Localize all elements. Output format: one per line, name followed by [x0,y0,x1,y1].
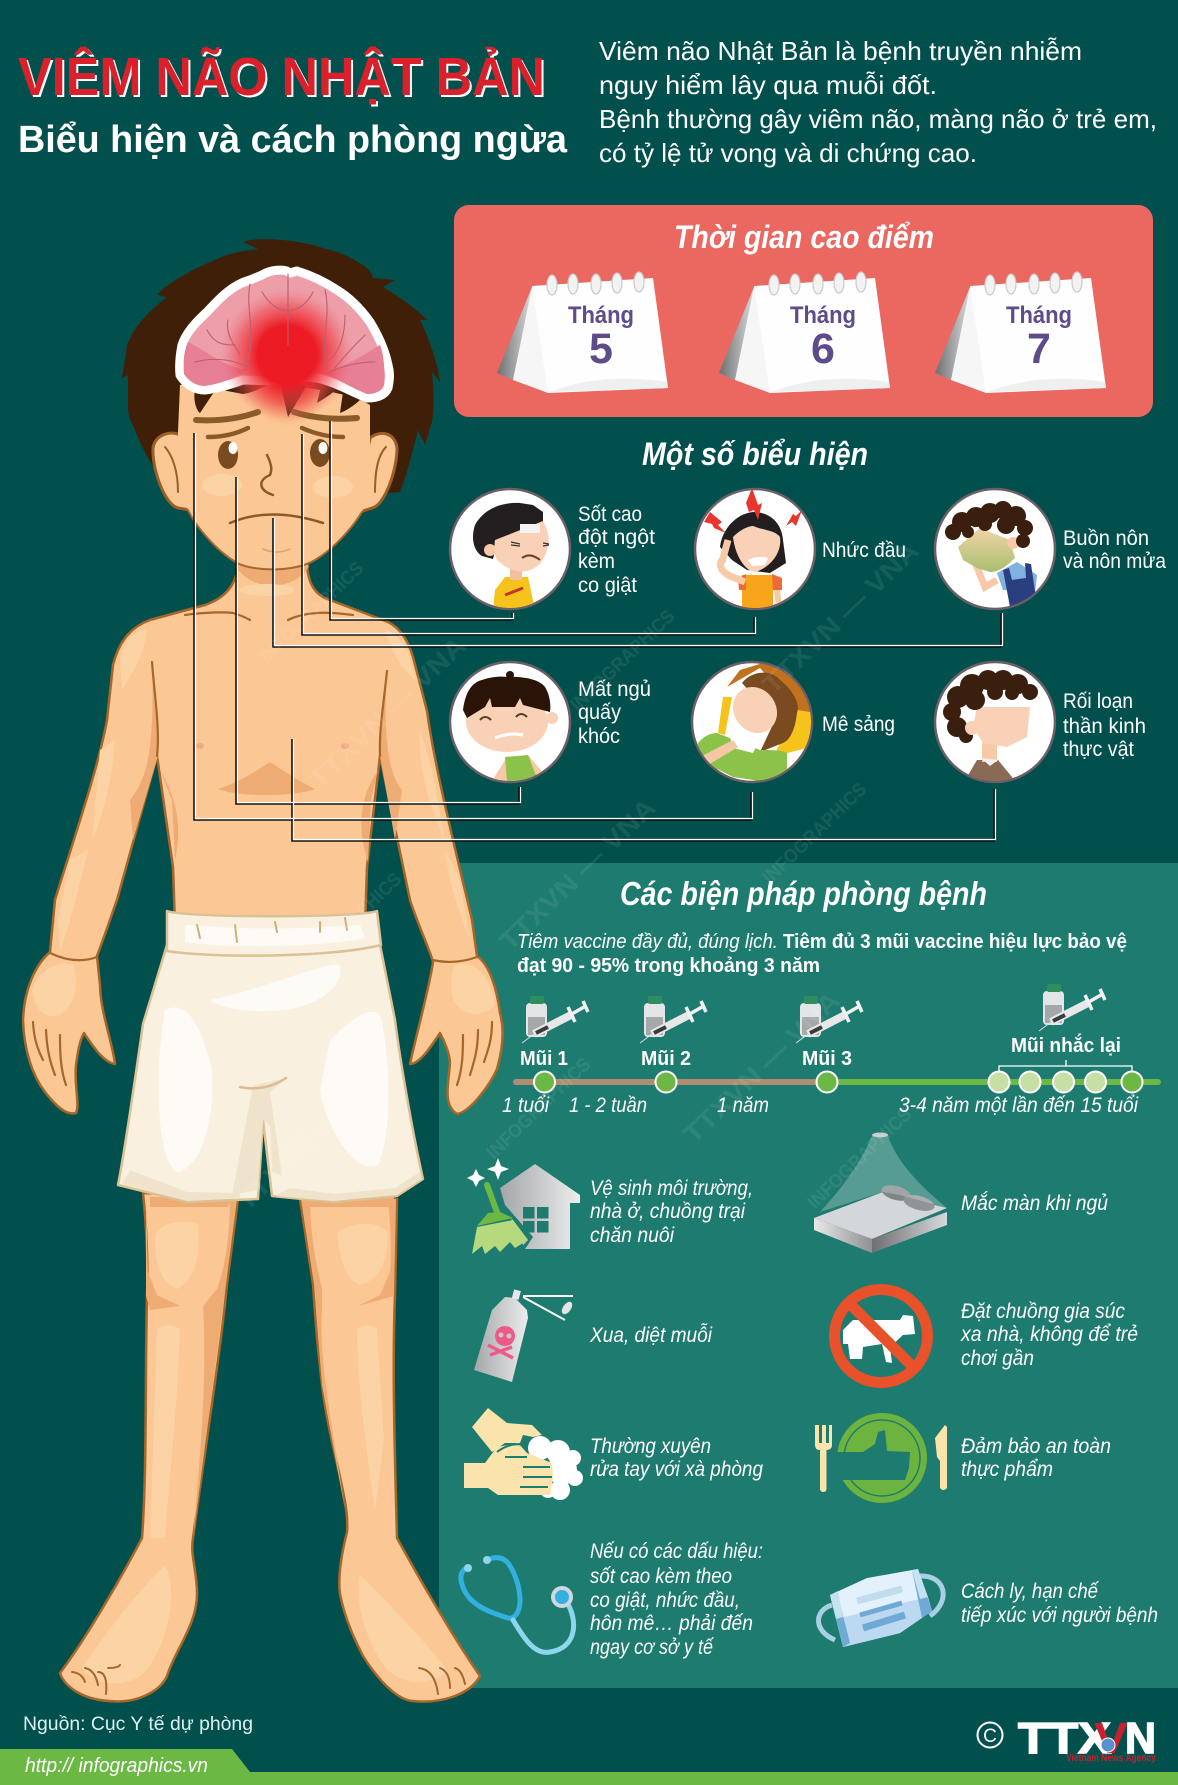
calendar: month 6 [719,272,890,393]
TTXVN wordmark [1018,1714,1156,1763]
face details [196,382,357,552]
calendar: month 7 [935,272,1106,393]
text: cattle [960,1300,1138,1370]
dose labels: Mũi 2 [641,1048,691,1070]
symptom: headache [695,488,815,610]
text: seek care: Nếu có các dấu hiệu: [590,1540,763,1563]
connector lines [194,421,1002,841]
subtitle: Biểu hiện và cách phòng ngừa [18,119,568,161]
text: hygiene: Vệ sinh môi trường, [590,1177,753,1200]
icon: face mask [818,1569,943,1647]
label: autonomic disorder: thực vật [1063,738,1134,761]
copyright mark: C [983,1726,997,1747]
face [178,382,371,569]
watermarks: INFOGRAPHICS [294,869,406,979]
label: insomnia: Mất ngủ [578,678,651,701]
interval labels: 1 - 2 tuần [569,1094,647,1117]
watermarks: TTXVN — VNA [493,792,662,956]
label: autonomic disorder [1063,690,1146,761]
text: hand washing: rửa tay với xà phòng [590,1458,763,1481]
text: mosquito net: Mắc màn khi ngủ [961,1192,1108,1215]
label: nausea [1063,527,1166,573]
timeline nodes [534,1072,1142,1092]
hair fringe [194,378,362,413]
label: headache: Nhức đầu [822,539,906,562]
agency name: Vietnam News Agency [1066,1753,1156,1764]
icon: broom and house [467,1158,580,1254]
watermarks: INFOGRAPHICS [256,558,368,668]
symptom: insomnia, crying [450,662,570,782]
dose labels [520,1033,1121,1070]
title: VIÊM NÃO NHẬT BẢN [18,46,545,107]
icon: no cattle [834,1290,928,1382]
watermarks: INFOGRAPHICS [567,606,679,716]
icon: mosquito net [814,1132,947,1253]
text: cattle: chơi gần [961,1347,1034,1370]
vaccine paragraph [517,931,1127,977]
legs [60,1193,480,1702]
text: hand washing [590,1435,763,1481]
text: cattle: Đặt chuồng gia súc [961,1300,1125,1323]
symptom: delirium [692,660,815,782]
label: high fever [578,503,655,597]
text: hand washing: Thường xuyên [590,1435,711,1458]
copyright mark [978,1722,1002,1748]
icon: insect spray [474,1289,574,1382]
interval labels [502,1094,1139,1117]
intro text: nguy hiểm lây qua muỗi đốt. [599,70,937,100]
interval labels: 1 tuổi [502,1094,550,1117]
calendar: month 7: Tháng [1006,302,1072,329]
intro text: có tỷ lệ tử vong và di chứng cao. [599,138,977,168]
text: spray: Xua, diệt muỗi [589,1324,713,1347]
vaccine paragraph: đạt 90 - 95% trong khoảng 3 năm [517,955,820,977]
shorts [118,911,423,1202]
label: insomnia: quấy [578,701,621,724]
calendar: month 5: Tháng [568,302,634,329]
watermarks: TTXVN — VNA [677,985,846,1149]
interval labels: 3-4 năm một lần đến 15 tuổi [899,1094,1139,1117]
label: high fever: co giật [578,574,637,597]
watermarks: TTXVN — VNA [756,535,925,699]
dose labels: Mũi 3 [802,1048,852,1070]
icon: vaccines [522,984,1105,1043]
calendar: month 7: 7 [1027,325,1051,373]
text: seek care: ngay cơ sở y tế [590,1636,714,1659]
timeline bar [513,1079,1161,1085]
intro text [599,36,1157,168]
watermarks: TTXVN — VNA [303,630,472,794]
label: insomnia [578,678,651,748]
intro text: Viêm não Nhật Bản là bệnh truyền nhiễm [599,36,1082,66]
calendar: month 6: 6 [811,325,835,373]
label: high fever: kèm [578,550,615,573]
ears [153,433,397,512]
calendar: month 5 [497,272,668,393]
label: delirium: Mê sảng [822,713,895,736]
logo [978,1714,1156,1764]
text: hygiene: nhà ở, chuồng trại [590,1200,746,1223]
text: cattle: xa nhà, không để trẻ [960,1323,1138,1346]
watermarks: INFOGRAPHICS [759,779,871,889]
calendar: month 5: 5 [589,325,613,373]
label: nausea: và nôn mửa [1063,550,1166,573]
symptom: autonomic disorder [935,662,1055,782]
text: seek care: sốt cao kèm theo [590,1565,732,1588]
watermarks: INFOGRAPHICS [804,1104,916,1214]
panel: prevention background [439,863,1178,1688]
text: isolation [961,1580,1158,1627]
text: hygiene [590,1177,753,1247]
label: nausea: Buồn nôn [1063,527,1149,550]
watermarks: INFOGRAPHICS [483,1054,595,1164]
forehead glow [245,343,329,427]
text: seek care: co giật, nhức đầu, [590,1589,740,1612]
hair [122,239,440,493]
text: food safety: thực phẩm [961,1458,1053,1481]
icon: food safety [815,1413,947,1503]
TTXVN wordmark: N [1125,1714,1156,1763]
label: autonomic disorder: thần kinh [1063,715,1146,738]
text: seek care [590,1540,763,1659]
label: insomnia: khóc [578,725,620,748]
dose labels: Mũi nhắc lại [1011,1033,1121,1057]
heading: peak time: Thời gian cao điểm [674,219,934,255]
label: autonomic disorder: Rối loạn [1063,690,1133,713]
calendar: month 6: Tháng [790,302,856,329]
bracket [999,1060,1132,1072]
panel: peak time [454,205,1153,417]
TTXVN wordmark: V [1094,1714,1129,1763]
source: Nguồn: Cục Y tế dự phòng [23,1714,253,1735]
text: isolation: tiếp xúc với người bệnh [961,1604,1158,1627]
footer url: http:// infographics.vn [25,1755,208,1777]
watermarks [230,535,925,1216]
text: isolation: Cách ly, hạn chế [961,1580,1099,1603]
label: high fever: đột ngột [578,526,655,549]
symptom: high fever [450,489,570,610]
text: seek care: hôn mê… phải đến [590,1612,753,1635]
interval labels: 1 năm [717,1094,769,1117]
TTXVN wordmark: TTX [1018,1714,1111,1763]
heading: prevention: Các biện pháp phòng bệnh [620,875,987,912]
vaccine paragraph: Tiêm đủ 3 mũi vaccine hiệu lực bảo vệ [783,931,1127,953]
text: food safety [961,1435,1111,1481]
icon: hand washing [464,1408,583,1500]
symptom: nausea [935,489,1055,609]
icon: stethoscope [461,1556,574,1652]
footer bar [0,1749,1178,1785]
watermarks: TTXVN — VNA [230,1052,399,1216]
brain [180,270,390,421]
heading: symptoms: Một số biểu hiện [642,436,868,472]
vaccine paragraph: Tiêm vaccine đầy đủ, đúng lịch. [517,931,778,953]
torso and arms [23,560,503,1114]
dose labels: Mũi 1 [520,1048,568,1070]
text: hygiene: chăn nuôi [590,1224,675,1247]
vaccine timeline [502,984,1161,1117]
text: food safety: Đảm bảo an toàn [961,1435,1111,1458]
intro text: Bệnh thường gây viêm não, màng não ở trẻ em, [599,104,1157,134]
label: high fever: Sốt cao [578,503,642,526]
illustration: boy body [23,239,503,1702]
globe [1101,1738,1115,1752]
